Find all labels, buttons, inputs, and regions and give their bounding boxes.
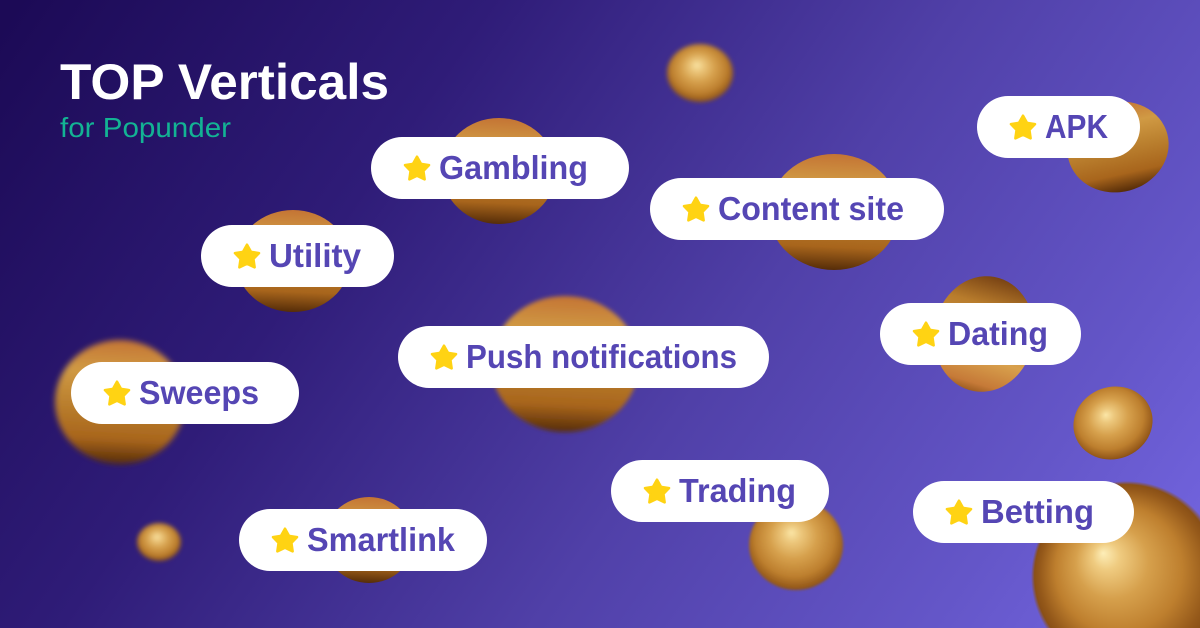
pill: Betting: Betting xyxy=(981,493,1094,530)
pill: Betting xyxy=(913,481,1134,543)
pill: Sweeps: Sweeps xyxy=(139,374,259,411)
pill: Dating: Dating xyxy=(948,315,1048,352)
pill: Sweeps xyxy=(71,362,299,424)
pill: Utility xyxy=(201,225,394,287)
pill: APK: APK xyxy=(1045,108,1108,145)
egg: top centre xyxy=(667,44,733,102)
egg: right middle xyxy=(1063,375,1163,471)
pill: Smartlink xyxy=(239,509,487,571)
icon: star xyxy=(947,501,971,523)
icon: star xyxy=(645,480,669,502)
icon: star xyxy=(914,323,938,345)
egg: behind Content site xyxy=(769,154,899,270)
icon: star xyxy=(432,346,456,368)
icon: star xyxy=(1011,116,1035,138)
pill: Trading xyxy=(611,460,829,522)
pill: Push notifications: Push notifications xyxy=(466,338,737,375)
subtitle: for Popunder xyxy=(60,112,231,143)
egg: behind Sweeps xyxy=(55,340,185,464)
egg: behind Trading xyxy=(749,500,843,590)
pill: Utility: Utility xyxy=(269,237,362,274)
pill: Smartlink: Smartlink xyxy=(307,521,456,558)
egg: behind Push notifications xyxy=(491,296,639,432)
egg: behind APK xyxy=(1057,90,1179,204)
icon: star xyxy=(273,529,297,551)
egg: small bottom left xyxy=(137,523,181,561)
egg: behind Smartlink xyxy=(324,497,414,583)
pill: Trading: Trading xyxy=(679,472,796,509)
egg: behind Utility xyxy=(236,210,350,312)
pill: APK xyxy=(977,96,1140,158)
egg: behind Dating xyxy=(925,268,1043,400)
icon: star xyxy=(105,382,129,404)
pill: Dating xyxy=(880,303,1081,365)
pill: Content site: Content site xyxy=(718,190,904,227)
pill: Gambling xyxy=(371,137,629,199)
icon: star xyxy=(235,245,259,267)
icon: star xyxy=(405,157,429,179)
icon: star xyxy=(684,198,708,220)
egg: behind Gambling xyxy=(442,118,556,224)
pill: Push notifications xyxy=(398,326,769,388)
egg: large bottom right xyxy=(1030,480,1200,628)
pill: Gambling: Gambling xyxy=(439,149,588,186)
title: TOP Verticals xyxy=(60,54,389,110)
pill: Content site xyxy=(650,178,944,240)
